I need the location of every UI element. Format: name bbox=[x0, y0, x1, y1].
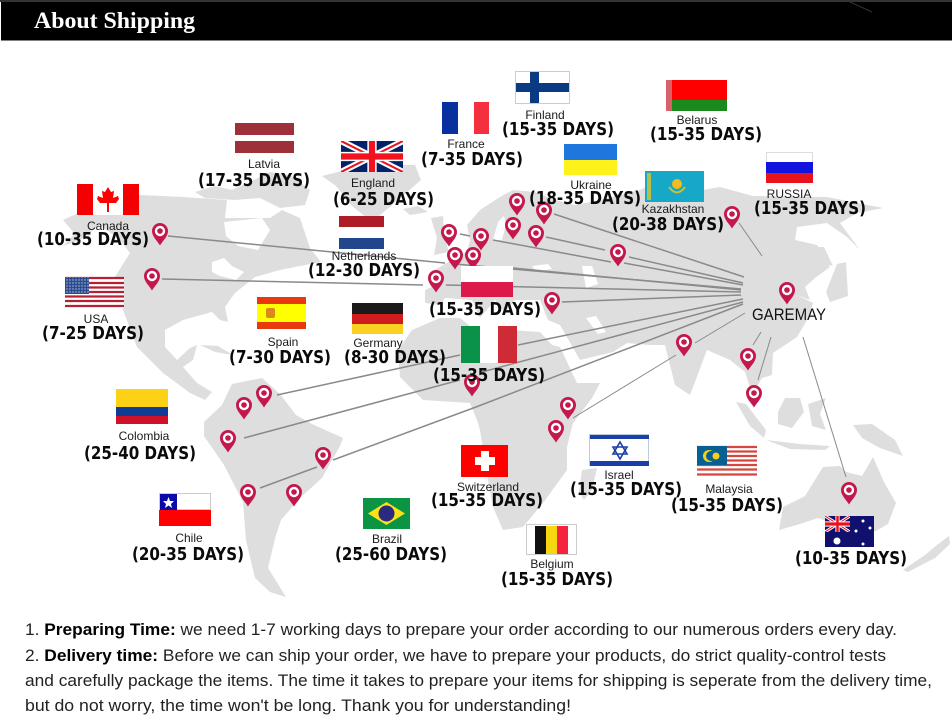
Spain: Spain bbox=[268, 335, 298, 349]
Russia bbox=[754, 152, 866, 219]
Germany bbox=[344, 303, 446, 368]
USA: USA bbox=[84, 312, 108, 326]
Belgium: (15-35 DAYS) bbox=[501, 569, 613, 590]
Belarus: Belarus bbox=[677, 113, 717, 127]
Chile: (20-35 DAYS) bbox=[132, 544, 244, 565]
Colombia: Colombia bbox=[119, 429, 170, 443]
Belarus: (15-35 DAYS) bbox=[650, 124, 762, 145]
Italy: (15-35 DAYS) bbox=[433, 365, 545, 386]
Latvia: Latvia bbox=[248, 157, 280, 171]
Brazil bbox=[335, 498, 447, 565]
Russia: (15-35 DAYS) bbox=[754, 198, 866, 219]
Malaysia: (15-35 DAYS) bbox=[671, 495, 783, 516]
Israel: Israel bbox=[604, 468, 634, 482]
Malaysia bbox=[671, 446, 783, 516]
note 2: delivery time bbox=[25, 647, 932, 715]
seas bbox=[212, 216, 606, 334]
Kazakhstan bbox=[612, 171, 724, 235]
Switzerland: (15-35 DAYS) bbox=[431, 490, 543, 511]
Italy bbox=[433, 326, 545, 386]
Canada: (10-35 DAYS) bbox=[37, 229, 149, 250]
header bar bbox=[0, 0, 952, 40]
note 1: preparing time: 1. Preparing Time: we need 1-7 working days to prepare your order according to our numerous orders every day. bbox=[25, 621, 897, 639]
Kazakhstan: Kazakhstan bbox=[642, 202, 704, 216]
USA bbox=[42, 277, 144, 344]
Netherlands: (12-30 DAYS) bbox=[308, 260, 420, 281]
Australia bbox=[795, 516, 907, 569]
Belgium: Belgium bbox=[530, 557, 574, 571]
England bbox=[333, 141, 434, 210]
Ukraine: (18-35 DAYS) bbox=[529, 188, 641, 209]
note 2: delivery time: but do not worry, the time won't be long. Thank you for understanding! bbox=[25, 697, 571, 715]
Switzerland: Switzerland bbox=[457, 480, 519, 494]
Kazakhstan: (20-38 DAYS) bbox=[612, 214, 724, 235]
Australia: (10-35 DAYS) bbox=[795, 548, 907, 569]
Chile bbox=[132, 494, 244, 565]
origin label: GAREMAY bbox=[752, 306, 826, 324]
Belgium bbox=[501, 524, 613, 590]
Brazil: (25-60 DAYS) bbox=[335, 544, 447, 565]
Ukraine: Ukraine bbox=[570, 178, 612, 192]
Brazil: Brazil bbox=[372, 532, 402, 546]
Ukraine bbox=[529, 144, 641, 209]
Netherlands bbox=[308, 216, 420, 281]
title: About Shipping bbox=[34, 8, 196, 33]
location pins bbox=[144, 193, 857, 506]
Israel bbox=[570, 434, 682, 500]
Latvia bbox=[198, 123, 310, 191]
England: (6-25 DAYS) bbox=[333, 189, 434, 210]
Canada bbox=[37, 184, 149, 250]
Chile: Chile bbox=[175, 531, 203, 545]
USA: (7-25 DAYS) bbox=[42, 323, 144, 344]
note 2: delivery time: and carefully package the items. The time it takes to prepare your items for shipping is seperate from the delivery time, bbox=[25, 672, 932, 690]
Russia: RUSSIA bbox=[767, 187, 811, 201]
Colombia: (25-40 DAYS) bbox=[84, 443, 196, 464]
France: (7-35 DAYS) bbox=[421, 149, 523, 170]
Germany: Germany bbox=[353, 336, 403, 350]
Finland: (15-35 DAYS) bbox=[502, 119, 614, 140]
Germany: (8-30 DAYS) bbox=[344, 347, 446, 368]
route lines bbox=[162, 214, 846, 488]
Israel: (15-35 DAYS) bbox=[570, 479, 682, 500]
Switzerland bbox=[431, 445, 543, 511]
Poland bbox=[429, 266, 541, 320]
note 2: delivery time: 2. Delivery time: Before we can ship your order, we have to prepare your products, do strict quality-control tests bbox=[25, 647, 886, 665]
Latvia: (17-35 DAYS) bbox=[198, 170, 310, 191]
notes text block bbox=[25, 621, 932, 715]
Canada: Canada bbox=[87, 219, 129, 233]
Finland bbox=[502, 72, 614, 140]
Malaysia: Malaysia bbox=[705, 482, 753, 496]
Spain: (7-30 DAYS) bbox=[229, 347, 331, 368]
Belarus bbox=[650, 80, 762, 145]
Netherlands: Netherlands bbox=[332, 249, 396, 263]
England: England bbox=[351, 176, 395, 190]
Poland: (15-35 DAYS) bbox=[429, 299, 541, 320]
Finland: Finland bbox=[525, 108, 565, 122]
France: France bbox=[447, 137, 485, 151]
France bbox=[421, 102, 523, 170]
Colombia bbox=[84, 389, 196, 464]
world map bbox=[63, 165, 950, 597]
Spain bbox=[229, 297, 331, 368]
